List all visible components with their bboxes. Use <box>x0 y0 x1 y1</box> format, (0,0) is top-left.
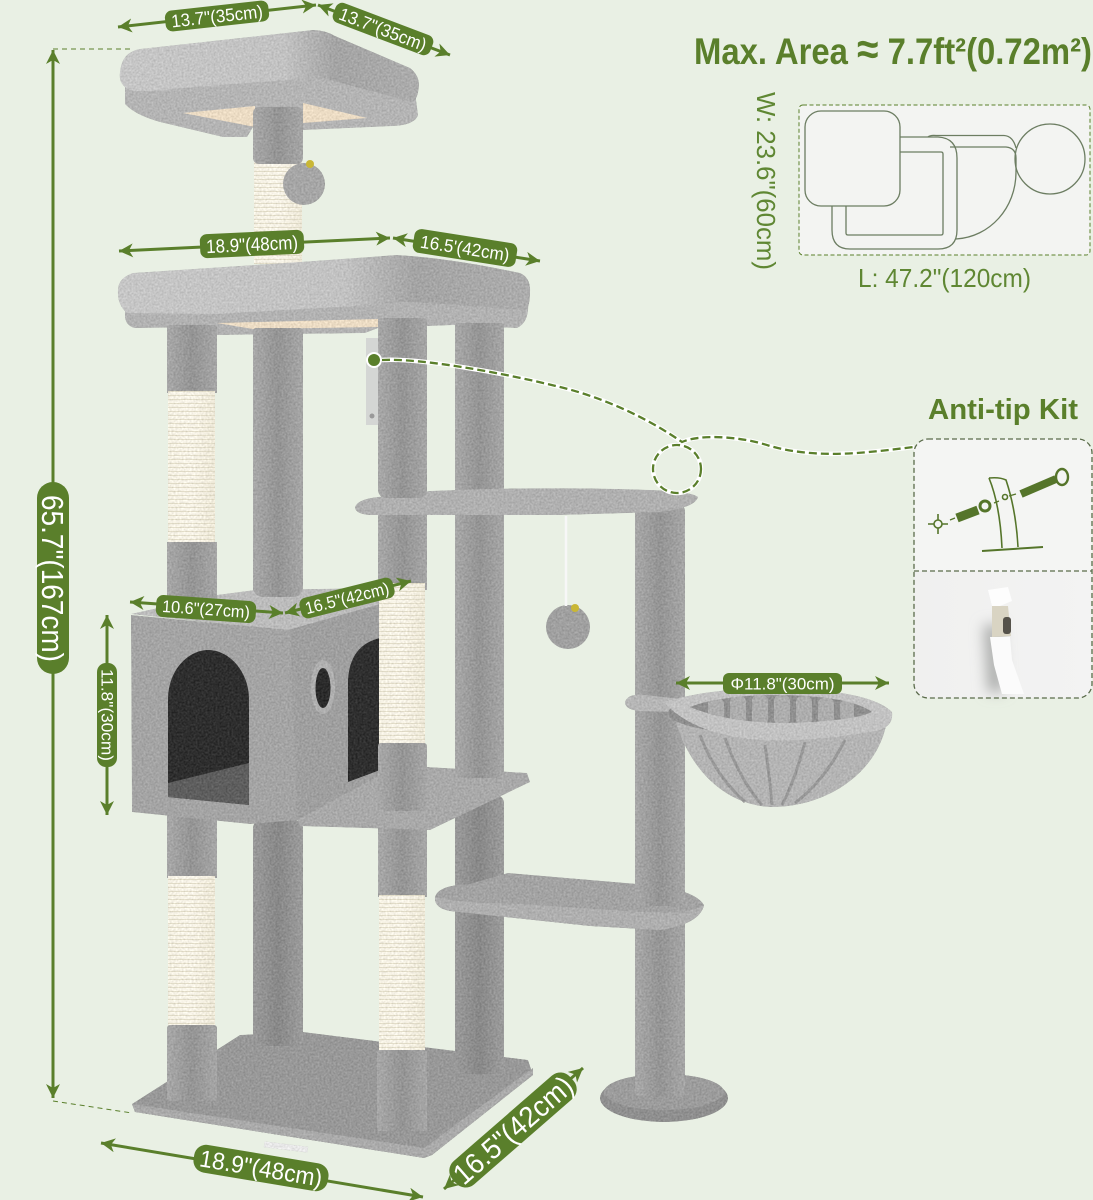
label: footprint width: W: 23.6"(60cm) <box>751 92 781 270</box>
round floor disc <box>600 1074 728 1122</box>
dimension: second shelf width <box>119 230 390 258</box>
dimension: base width: 18.9"(48cm) <box>197 1145 324 1193</box>
second shelf cushion lower <box>125 285 528 335</box>
post mid right <box>455 490 504 780</box>
post upper back right <box>455 323 504 493</box>
post right lower <box>455 795 504 1074</box>
post D over shelf <box>455 690 504 778</box>
post C sisal and base <box>378 545 427 811</box>
front arch opening <box>168 650 249 805</box>
post C below half shelf <box>378 510 427 590</box>
shelf posts tops <box>167 318 504 368</box>
half-moon shelf <box>355 488 698 515</box>
second shelf cushion upper <box>118 255 530 314</box>
dimension: hammock diameter <box>676 673 889 694</box>
post upper left <box>167 325 217 604</box>
dimension: house depth <box>285 576 411 620</box>
dimension: total height <box>35 50 70 1098</box>
post C upper <box>378 318 427 498</box>
bells and string <box>306 160 579 612</box>
hammock tail ring <box>625 695 700 722</box>
hanging ball top <box>283 163 325 205</box>
floor-standing far post <box>635 505 685 1097</box>
round window <box>311 660 335 714</box>
top post <box>254 160 302 264</box>
hanging ball lower <box>546 605 590 649</box>
dimension: house height <box>97 615 117 815</box>
dimension: total height: 65.7"(167cm) <box>35 495 70 662</box>
base board <box>132 1032 533 1158</box>
photo: installed bracket <box>914 571 1092 698</box>
dimension: top perch depth: 13.7"(35cm) <box>336 4 429 55</box>
post upper back left <box>253 325 303 597</box>
post front right lower <box>377 825 427 1131</box>
second shelf sand underside <box>217 319 378 329</box>
top perch underside <box>183 103 367 127</box>
dimension: second shelf depth <box>393 228 540 268</box>
top perch post <box>253 107 303 164</box>
cat tree <box>118 30 892 1158</box>
callout connector <box>382 360 914 493</box>
dimension: house width <box>130 595 283 623</box>
dimension: base width <box>101 1143 423 1197</box>
lower shelf of house <box>297 767 530 830</box>
hammock bowl <box>664 688 892 807</box>
house front <box>131 615 298 824</box>
wall bracket <box>366 338 378 425</box>
dimension: base depth: 16.5"(42cm) <box>447 1070 580 1191</box>
house roof <box>131 588 380 631</box>
label: footprint length: L: 47.2"(120cm) <box>858 263 1031 293</box>
panel: anti-tip kit <box>914 439 1092 698</box>
callout dot <box>367 353 381 367</box>
dimension: second shelf width: 18.9"(48cm) <box>206 233 299 258</box>
dimension: second shelf depth: 16.5'(42cm) <box>419 232 511 265</box>
heading: anti-tip kit: Anti-tip Kit <box>928 394 1078 426</box>
dimension: house depth: 16.5"(42cm) <box>303 579 391 618</box>
house side wall <box>288 604 380 820</box>
dimension: house height: 11.8"(30cm) <box>98 669 116 761</box>
dimension: top perch width: 13.7"(35cm) <box>170 2 264 31</box>
top perch upper cushion <box>120 30 419 102</box>
dashed reference lines for height <box>53 49 132 1113</box>
side arch opening <box>348 638 380 782</box>
post front left lower <box>167 812 217 1101</box>
footprint diagram <box>799 105 1090 255</box>
dimension: house width: 10.6"(27cm) <box>161 597 251 622</box>
icon: bracket and screw <box>928 469 1068 551</box>
post stubs on roof <box>167 560 303 599</box>
far post above lower shelf <box>635 800 685 906</box>
lower curved shelf <box>435 873 704 930</box>
dimension: top perch width <box>118 0 316 32</box>
dimension: hammock diameter: Φ11.8"(30cm) <box>730 674 834 694</box>
top perch lower cushion <box>125 70 418 137</box>
post back lower <box>253 820 303 1046</box>
